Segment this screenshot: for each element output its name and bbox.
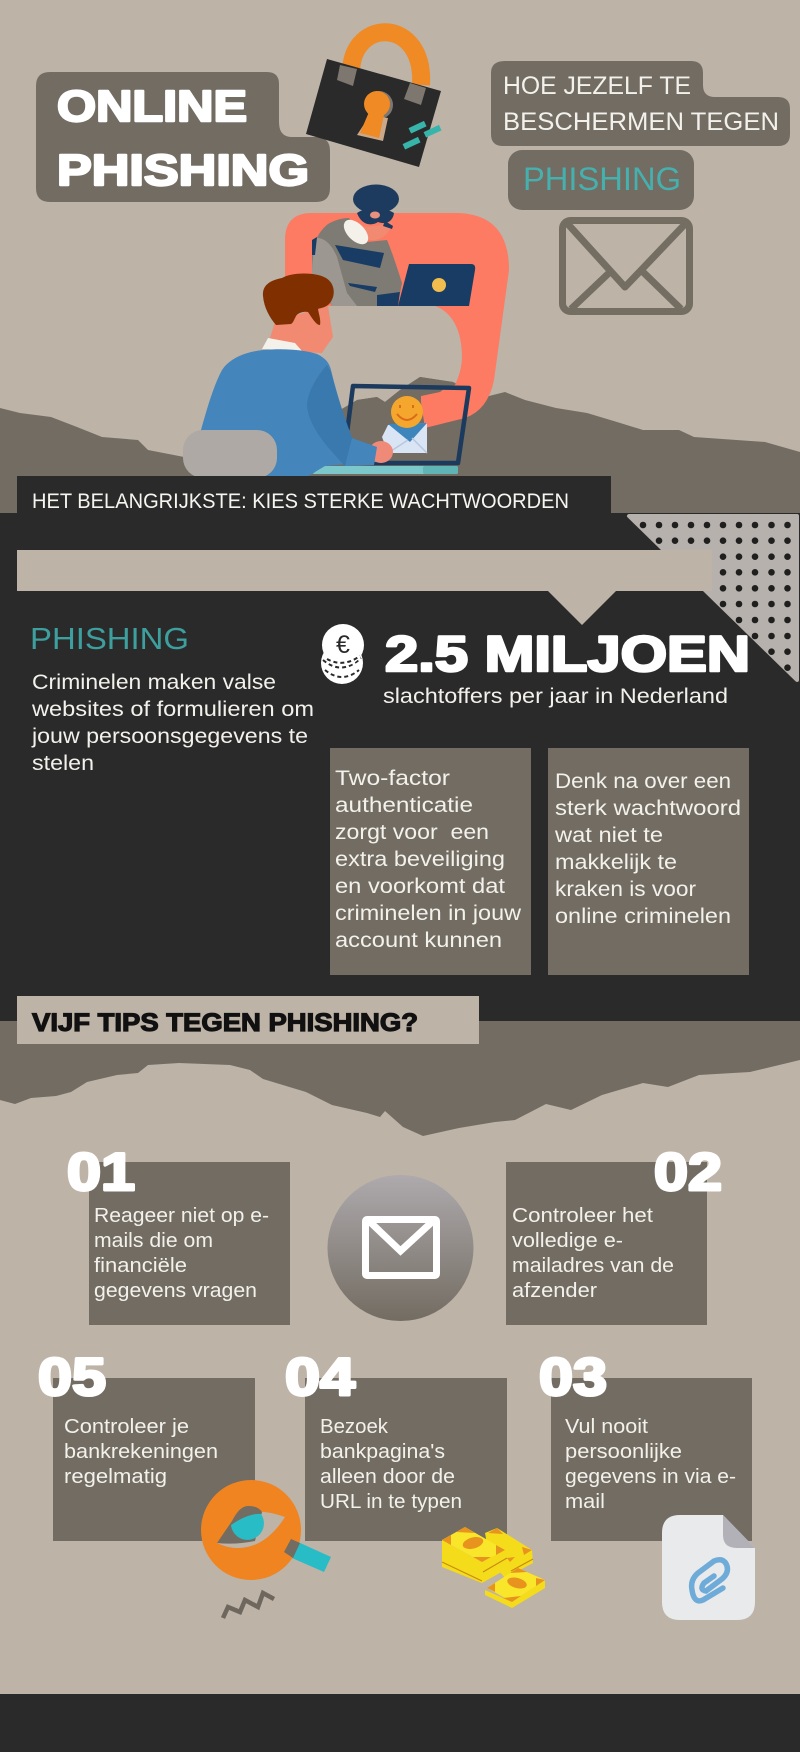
laptop base xyxy=(308,466,458,474)
statistic: 2.5 miljoen: 2.5 MILJOEN xyxy=(385,626,750,682)
tip 02: afzender xyxy=(512,1279,597,1302)
panel: two-factor xyxy=(330,748,531,975)
phishing explanation: PHISHING xyxy=(30,621,189,656)
heading: vijf tips tegen phishing xyxy=(17,996,479,1044)
statistic: 2.5 miljoen: slachtoffers per jaar in Nederland xyxy=(383,684,728,708)
right stack xyxy=(485,1528,533,1578)
panel: sterk wachtwoord: kraken is voor xyxy=(555,877,696,901)
panel: sterk wachtwoord xyxy=(548,748,749,975)
tip 04: Bezoek xyxy=(320,1415,389,1438)
coral speech shape xyxy=(285,213,509,428)
subtitle: phishing: PHISHING xyxy=(523,161,681,197)
top banner: het belangrijkste xyxy=(17,476,611,514)
panel: two-factor: zorgt voor een xyxy=(335,820,489,844)
tip 05: bankrekeningen xyxy=(64,1440,218,1463)
tip 04: bankpagina's xyxy=(320,1440,445,1463)
icon: envelope outline xyxy=(562,220,690,312)
statistic: 2.5 miljoen xyxy=(383,626,750,708)
icon: file with paperclip xyxy=(662,1515,755,1620)
tip 04: 04 xyxy=(285,1348,356,1407)
panel: two-factor: extra beveiliging xyxy=(335,847,505,871)
tip 04: URL in te typen xyxy=(320,1490,462,1513)
mountain silhouette: bottom xyxy=(0,1021,800,1136)
phishing explanation: Criminelen maken valse xyxy=(32,670,276,694)
top banner: het belangrijkste: HET BELANGRIJKSTE: KIES STERKE WACHTWOORDEN xyxy=(32,490,569,513)
laptop screen xyxy=(347,386,469,463)
tip 03: Vul nooit xyxy=(565,1415,648,1438)
icon: padlock xyxy=(306,32,442,167)
title: online phishing: PHISHING xyxy=(57,146,309,195)
panel: two-factor: en voorkomt dat xyxy=(335,874,505,898)
icon: zigzag xyxy=(223,1593,274,1618)
tip 02: mailadres van de xyxy=(512,1254,674,1277)
tip 05 xyxy=(38,1348,255,1541)
big stack xyxy=(442,1527,507,1583)
subtitle: phishing xyxy=(508,150,694,210)
panel: sterk wachtwoord: online criminelen xyxy=(555,904,731,928)
tip 01: Reageer niet op e- xyxy=(94,1204,269,1227)
tip 02: Controleer het xyxy=(512,1204,653,1227)
tip 03: gegevens in via e- xyxy=(565,1465,736,1488)
tip 03: persoonlijke xyxy=(565,1440,682,1463)
tip 01: gegevens vragen xyxy=(94,1279,257,1302)
tip 01: mails die om xyxy=(94,1229,213,1252)
tip 05: regelmatig xyxy=(64,1465,167,1488)
panel: two-factor: account kunnen xyxy=(335,928,502,952)
tip 01: 01 xyxy=(67,1143,135,1202)
panel: sterk wachtwoord: makkelijk te xyxy=(555,850,677,874)
icon: mail circle xyxy=(328,1175,474,1321)
icon: magnifying glass with eye xyxy=(201,1480,331,1580)
tip 01: financiële xyxy=(94,1254,187,1277)
tip 01 xyxy=(67,1143,290,1325)
phishing explanation: websites of formulieren om xyxy=(31,697,314,721)
subtitle: hoe jezelf te beschermen tegen: HOE JEZELF TE xyxy=(503,72,691,100)
tip 05: 05 xyxy=(38,1348,106,1407)
tip 04 xyxy=(285,1348,507,1541)
title: online phishing: ONLINE xyxy=(57,82,247,131)
subtitle: hoe jezelf te beschermen tegen xyxy=(491,61,790,146)
icon: euro coins: € xyxy=(336,631,350,659)
panel: sterk wachtwoord: wat niet te xyxy=(554,823,663,847)
title: online phishing xyxy=(36,72,330,202)
panel: two-factor: criminelen in jouw xyxy=(335,901,522,925)
panel: two-factor: Two-factor xyxy=(335,766,450,790)
mountain peak over coral xyxy=(345,377,453,462)
footer bar xyxy=(0,1694,800,1752)
man xyxy=(183,274,393,478)
dark section background xyxy=(0,513,800,1021)
tip 02: 02 xyxy=(654,1143,722,1202)
mountain silhouette: top xyxy=(0,377,800,515)
tip 02: volledige e- xyxy=(512,1229,623,1252)
phishing explanation: stelen xyxy=(32,751,94,775)
phishing explanation: jouw persoonsgegevens te xyxy=(31,724,308,748)
thief xyxy=(312,184,475,306)
tip 03: mail xyxy=(565,1490,605,1513)
panel: two-factor: authenticatie xyxy=(335,793,473,817)
heading: vijf tips tegen phishing: VIJF TIPS TEGEN PHISHING? xyxy=(32,1009,418,1037)
front stack xyxy=(485,1568,545,1608)
tip 05: Controleer je xyxy=(64,1415,189,1438)
illustration: phishing scene xyxy=(183,184,509,478)
tip 04: alleen door de xyxy=(320,1465,455,1488)
smiley and mail xyxy=(382,396,427,453)
panel: sterk wachtwoord: Denk na over een xyxy=(555,769,731,793)
phishing explanation xyxy=(30,621,314,775)
subtitle: hoe jezelf te beschermen tegen: BESCHERMEN TEGEN xyxy=(503,108,779,136)
beige callout banner with pointer xyxy=(17,550,712,625)
panel: sterk wachtwoord: sterk wachtwoord xyxy=(555,796,741,820)
tip 03 xyxy=(539,1348,752,1541)
tip 02 xyxy=(506,1143,722,1325)
icon: stacks of cash xyxy=(442,1527,545,1608)
tip 03: 03 xyxy=(539,1348,607,1407)
decorative dotted triangle xyxy=(629,516,797,680)
icon: euro coins xyxy=(321,624,364,684)
